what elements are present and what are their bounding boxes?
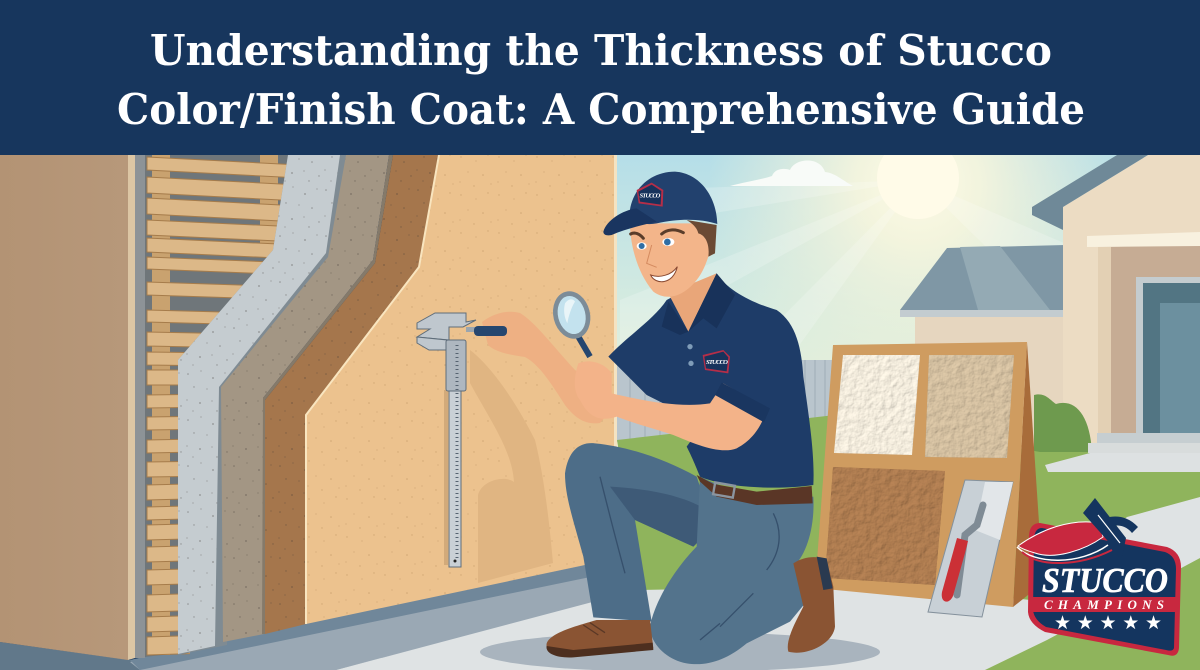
arm shadow on wall bbox=[470, 350, 553, 583]
worker: front boot bbox=[547, 620, 653, 657]
finishing trowel bbox=[928, 480, 1013, 617]
wall: left plain section bbox=[0, 155, 135, 660]
title line 2: Color/Finish Coat: A Comprehensive Guide bbox=[117, 85, 1085, 134]
swatch: beige finish bbox=[925, 355, 1014, 458]
fence bbox=[617, 360, 835, 442]
cap logo: STUCCO bbox=[640, 193, 661, 200]
ground: foundation and sidewalk band bbox=[0, 552, 700, 670]
wall: brown coat bbox=[265, 155, 439, 634]
background: sky bbox=[610, 137, 1200, 455]
logo: red band bbox=[1032, 597, 1176, 612]
worker: bent leg bbox=[565, 443, 713, 622]
worker: magnifying glass bbox=[548, 287, 595, 357]
lawn bbox=[617, 415, 1200, 670]
worker: kneeling leg bbox=[650, 477, 814, 664]
worker: shirt logo: STUCCO bbox=[706, 359, 728, 366]
back house bbox=[900, 245, 1065, 455]
logo: trowel mark bbox=[1083, 498, 1138, 557]
wall: taupe brown coat bbox=[221, 155, 393, 642]
worker: reaching arm holding caliper bbox=[482, 312, 620, 423]
logo: CHAMPIONS wordmark: CHAMPIONS bbox=[1044, 597, 1164, 612]
worker: head bbox=[630, 220, 717, 297]
worker: shirt bbox=[608, 273, 814, 488]
caliper handle bbox=[474, 326, 507, 336]
cloud bbox=[730, 160, 853, 186]
worker: collar bbox=[662, 273, 735, 335]
worker: sleeve bbox=[715, 383, 770, 422]
caliper bbox=[417, 313, 476, 567]
sample board bbox=[815, 342, 1043, 607]
main house bbox=[1032, 155, 1200, 470]
wall: lath layer bbox=[135, 155, 300, 658]
wall: gray scratch coat bbox=[178, 155, 348, 655]
worker: belt bbox=[697, 475, 813, 505]
ground shadow under worker bbox=[480, 632, 880, 670]
logo: STUCCO wordmark: STUCCO bbox=[1042, 561, 1168, 600]
worker: uses zoomed coordinates scaled to page bbox=[547, 172, 835, 664]
logo: stars: ★★★★★ bbox=[1054, 612, 1162, 634]
title banner bbox=[0, 0, 1200, 155]
worker: back boot bbox=[788, 557, 835, 653]
logo: Stucco Champions bbox=[1017, 498, 1181, 656]
worker: shirt logo bbox=[703, 350, 730, 373]
wall: color finish coat bbox=[306, 155, 617, 624]
bush bbox=[1034, 394, 1092, 453]
worker: neck bbox=[668, 273, 717, 332]
front steps and landing bbox=[1045, 433, 1200, 472]
worker: cap bbox=[603, 172, 717, 235]
worker: arm and hand with magnifier bbox=[575, 361, 767, 450]
swatch: white finish bbox=[834, 355, 920, 455]
title line 1: Understanding the Thickness of Stucco bbox=[150, 26, 1052, 75]
swatch: brown finish bbox=[825, 467, 945, 585]
walkway bbox=[640, 497, 1200, 670]
worker: shirt buttons bbox=[687, 344, 694, 366]
logo: red swoosh bbox=[1017, 522, 1112, 563]
